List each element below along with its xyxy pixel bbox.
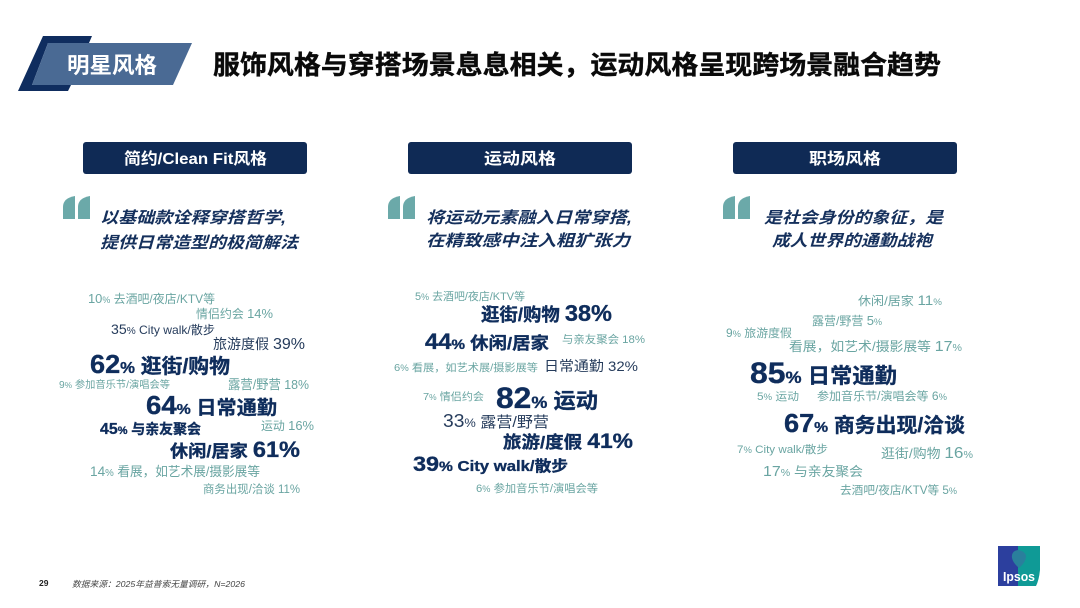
title: 服饰风格与穿搭场景息息相关，运动风格呈现跨场景融合趋势 bbox=[213, 50, 941, 80]
word cloud: 简约 scenes: 9% 参加音乐节/演唱会等 bbox=[59, 378, 170, 391]
word cloud: 运动 scenes: 6% 看展，如艺术展/摄影展等 bbox=[394, 361, 539, 374]
quote text bbox=[764, 209, 944, 250]
word cloud: 职场 scenes: 5% 运动 bbox=[757, 390, 799, 403]
column header: 职场风格: 职场风格 bbox=[809, 149, 881, 168]
word cloud: 简约 scenes: 45% 与亲友聚会 bbox=[100, 421, 201, 438]
column header: 简约/Clean Fit风格: 简约/Clean Fit风格 bbox=[124, 149, 267, 168]
word cloud: 职场 scenes: 休闲/居家 11% bbox=[858, 292, 942, 308]
quote text bbox=[100, 209, 300, 252]
word cloud: 简约 scenes: 情侣约会 14% bbox=[196, 306, 273, 321]
column header: 运动风格: 运动风格 bbox=[484, 149, 556, 168]
quote text: 提供日常造型的极简解法 bbox=[100, 234, 300, 252]
word cloud: 职场 scenes bbox=[726, 292, 973, 497]
word cloud: 运动 scenes: 逛街/购物 38% bbox=[481, 300, 612, 326]
section tag: 明星风格 bbox=[18, 36, 192, 91]
page number: 29 bbox=[39, 578, 49, 588]
word cloud: 简约 scenes bbox=[59, 291, 314, 496]
quote text: 成人世界的通勤战袍 bbox=[772, 232, 934, 250]
word cloud: 职场 scenes: 85% 日常通勤 bbox=[750, 357, 897, 390]
word cloud: 运动 scenes: 82% 运动 bbox=[496, 382, 598, 415]
section tag: 明星风格: 明星风格 bbox=[67, 53, 157, 78]
word cloud: 运动 scenes: 39% City walk/散步 bbox=[413, 453, 568, 476]
word cloud: 简约 scenes: 62% 逛街/购物 bbox=[90, 349, 230, 379]
word cloud: 运动 scenes: 6% 参加音乐节/演唱会等 bbox=[476, 481, 598, 495]
icon: quotation mark bbox=[388, 196, 415, 219]
panel: 运动风格 bbox=[388, 142, 645, 495]
word cloud: 职场 scenes: 参加音乐节/演唱会等 6 % bbox=[817, 389, 947, 403]
column header: 职场风格 bbox=[733, 142, 957, 174]
word cloud: 简约 scenes: 露营/野营 18% bbox=[228, 377, 309, 392]
word cloud: 职场 scenes: 7% City walk/散步 bbox=[737, 442, 828, 456]
word cloud: 运动 scenes: 33% 露营/野营 bbox=[443, 411, 549, 431]
word cloud: 运动 scenes: 44% 休闲/居家 bbox=[425, 329, 549, 354]
word cloud: 简约 scenes: 商务出现/洽谈 11% bbox=[203, 482, 300, 496]
word cloud: 职场 scenes: 67% 商务出现/洽谈 bbox=[784, 408, 965, 438]
source note: 数据来源：2025年益普索无量调研，N=2026 bbox=[72, 579, 245, 589]
word cloud: 运动 scenes: 与亲友聚会 18% bbox=[562, 332, 645, 346]
word cloud: 运动 scenes bbox=[394, 289, 645, 495]
column header: 运动风格 bbox=[408, 142, 632, 174]
word cloud: 简约 scenes: 10% 去酒吧/夜店/KTV等 bbox=[88, 291, 215, 306]
panel: 职场风格 bbox=[723, 142, 973, 497]
word cloud: 职场 scenes: 露营/野营 5% bbox=[812, 313, 882, 328]
word cloud: 运动 scenes: 5% 去酒吧/夜店/KTV等 bbox=[415, 289, 525, 303]
word cloud: 运动 scenes: 日常通勤 32% bbox=[544, 358, 638, 374]
word cloud: 职场 scenes: 看展，如艺术/摄影展等 17% bbox=[789, 338, 962, 355]
quote text: 将运动元素融入日常穿搭, bbox=[426, 209, 632, 227]
column header: 简约/Clean Fit风格 bbox=[83, 142, 307, 174]
word cloud: 简约 scenes: 运动 16% bbox=[261, 418, 314, 433]
word cloud: 职场 scenes: 逛街/购物 16% bbox=[881, 445, 973, 462]
word cloud: 简约 scenes: 旅游度假 39% bbox=[213, 336, 305, 353]
word cloud: 职场 scenes: 去酒吧/夜店/KTV等 5% bbox=[840, 483, 957, 497]
word cloud: 运动 scenes: 7% 情侣约会 bbox=[423, 390, 485, 403]
quote text bbox=[426, 209, 632, 250]
word cloud: 简约 scenes: 35% City walk/散步 bbox=[111, 321, 215, 337]
quote text: 在精致感中注入粗犷张力 bbox=[426, 232, 632, 250]
icon: quotation mark bbox=[723, 196, 750, 219]
word cloud: 职场 scenes: 17% 与亲友聚会 bbox=[763, 463, 863, 480]
panel: 简约/Clean Fit风格 bbox=[59, 142, 314, 496]
word cloud: 简约 scenes: 休闲/居家 61% bbox=[170, 437, 300, 462]
icon: Ipsos logo: Ipsos bbox=[1003, 569, 1035, 584]
word cloud: 简约 scenes: 64% 日常通勤 bbox=[146, 390, 277, 420]
word cloud: 简约 scenes: 14% 看展，如艺术展/摄影展等 bbox=[90, 463, 260, 479]
quote text: 以基础款诠释穿搭哲学, bbox=[100, 209, 286, 227]
icon: quotation mark bbox=[63, 196, 90, 219]
icon: Ipsos logo bbox=[998, 546, 1040, 586]
word cloud: 职场 scenes: 9% 旅游度假 bbox=[726, 326, 793, 340]
quote text: 是社会身份的象征，是 bbox=[764, 209, 944, 227]
word cloud: 运动 scenes: 旅游/度假 41% bbox=[503, 430, 633, 453]
